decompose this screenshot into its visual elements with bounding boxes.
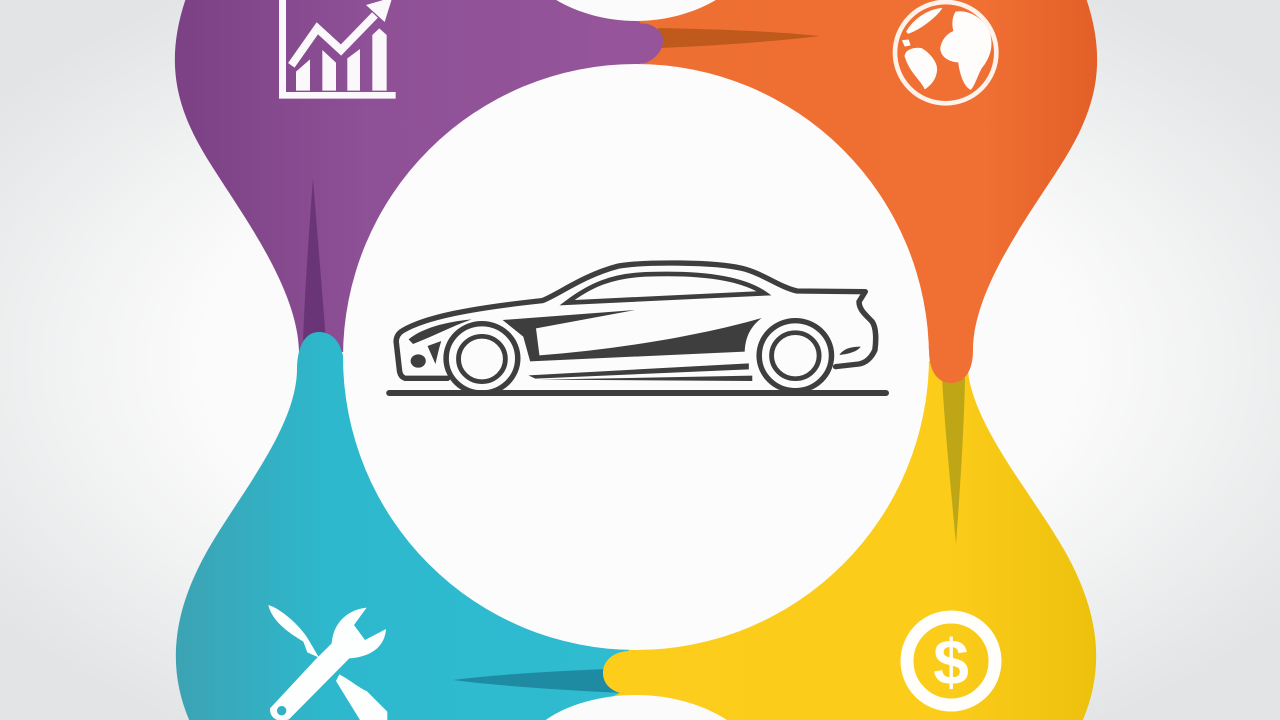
panel: purple analytics [175,0,660,352]
car window [567,274,764,303]
chart axes [279,0,396,99]
rear reflector [839,347,861,355]
panel: orange global [560,0,1097,383]
car side swoosh [503,310,762,361]
car body outline [396,263,876,378]
icon: dollar coin [907,617,995,705]
headlight [409,319,472,344]
icon: wrench and screwdriver [268,605,387,720]
panel: teal service [176,332,640,720]
top white notch [553,0,719,21]
wedge: purple shadow [303,178,326,340]
front wheel [446,324,518,393]
icon: globe [895,2,996,103]
icon: car [389,263,886,393]
wrench [270,608,386,720]
icon: growth chart [279,0,396,99]
center circle [343,64,929,650]
rear wheel [759,321,831,391]
wedge: teal shadow [453,669,622,693]
fog lamp [411,354,426,368]
screwdriver blade [268,605,319,658]
screwdriver handle [336,674,387,720]
wedge: yellow shadow [942,378,965,544]
trend arrow [291,0,392,65]
globe ring [895,2,996,103]
wedge: orange shadow [658,28,820,48]
front vent [428,341,441,364]
bottom white notch [543,695,730,720]
dollar sign: $ [933,626,969,698]
sill lines [528,363,752,381]
ground line [389,384,886,402]
continents [903,8,991,89]
chart bars [296,28,387,91]
tip: purple overlap [590,18,663,68]
panel: yellow finance [560,360,1096,720]
coin ring [907,617,995,705]
